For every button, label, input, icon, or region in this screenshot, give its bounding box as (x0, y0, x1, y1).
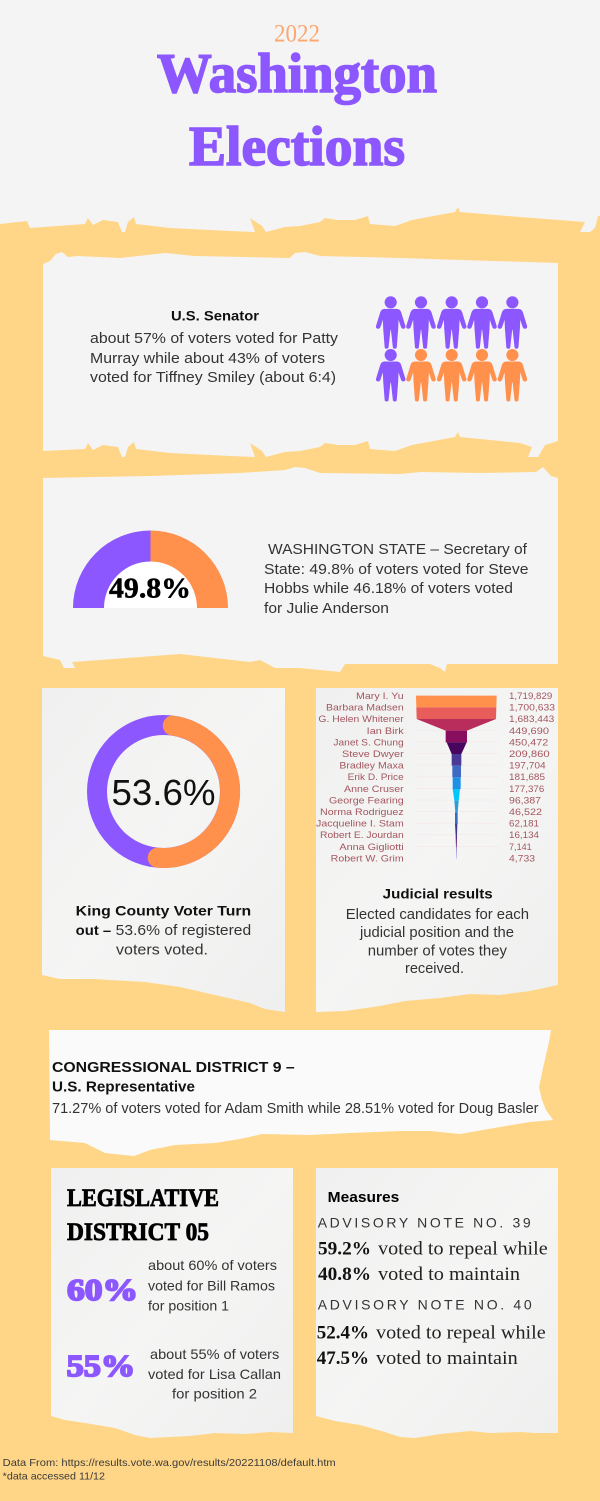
heading: U.S. Representative (52, 1080, 195, 1096)
advisory note 39: voted to maintain (378, 1264, 521, 1285)
text block: out – (76, 922, 111, 938)
panel: U.S. Senator (43, 252, 558, 457)
vote counts: 96,387 (509, 795, 541, 806)
vote counts: 1,719,829 (509, 691, 552, 702)
text block: Lisa Callan: voted for Lisa Callan (148, 1366, 281, 1382)
source note: *data accessed 11/12 (3, 1470, 105, 1482)
candidate names: Bradley Maxa (339, 761, 404, 772)
funnel chart (316, 691, 555, 864)
vote counts: 450,472 (509, 737, 548, 748)
candidate names: Robert W. Grim (331, 854, 404, 864)
text block (90, 330, 339, 386)
candidate names: Steve Dwyer (342, 749, 404, 760)
text block: Bill Ramos (148, 1257, 277, 1314)
panel: Congressional District 9 (49, 1030, 553, 1156)
text block: Bill Ramos: for position 1 (148, 1298, 229, 1314)
candidate names: Norma Rodriguez (320, 807, 404, 818)
heading: Measures (328, 1189, 399, 1206)
gauge value: 49.8% (109, 574, 191, 604)
text block: voters voted. (116, 942, 208, 958)
title line 2: Elections (189, 116, 405, 178)
advisory note 39: 40.8% (318, 1264, 371, 1285)
donut value: 53.6% (112, 772, 216, 813)
candidate names: G. Helen Whitener (318, 714, 404, 725)
heading: Judicial results (383, 885, 493, 901)
advisory note 39: voted to repeal while (378, 1238, 548, 1259)
funnel segments (416, 696, 497, 859)
panel: Legislative District 05 (51, 1168, 293, 1438)
year: 2022 (274, 20, 320, 48)
panel: Judicial results (316, 688, 558, 1012)
vote counts: 197,704 (509, 761, 546, 772)
advisory note 40: voted to maintain (376, 1348, 518, 1369)
candidate names: Erik D. Price (348, 772, 404, 783)
text block: WASHINGTON STATE – Secretary of (268, 541, 528, 558)
title line 1: Washington (157, 43, 437, 105)
advisory note 40 (317, 1296, 546, 1369)
vote counts: 177,376 (509, 784, 544, 795)
candidate names: George Fearing (329, 795, 404, 806)
text block: about 57% of voters voted for Patty (90, 330, 339, 347)
vote counts: 4,733 (509, 854, 535, 864)
text block: voted for Tiffney Smiley (about 6:4) (90, 369, 336, 386)
candidate names: Jacqueline I. Stam (316, 819, 404, 830)
vote counts: 62,181 (509, 819, 539, 830)
text block: Lisa Callan: about 55% of voters (150, 1346, 279, 1362)
vote counts: 449,690 (509, 726, 549, 737)
advisory note 40: 52.4% (317, 1322, 369, 1343)
heading: U.S. Senator (171, 308, 260, 324)
advisory note 39: ADVISORY NOTE NO. 39 (318, 1215, 531, 1231)
text block: Murray while about 43% of voters (90, 350, 325, 367)
text block: 71.27% of voters voted for Adam Smith while 28.51% voted for Doug Basler (52, 1100, 538, 1117)
header panel with torn edge (0, 0, 600, 232)
candidate names: Anne Cruser (344, 784, 404, 795)
vote counts: 46,522 (509, 807, 542, 818)
source note (3, 1457, 336, 1482)
text block: judicial position and the (359, 924, 514, 941)
heading: LEGISLATIVE (67, 1185, 219, 1212)
advisory note 39: 59.2% (318, 1238, 371, 1259)
vote counts: 7,141 (509, 842, 532, 853)
text block: King County Voter Turn (76, 902, 251, 918)
heading (67, 1185, 219, 1246)
advisory note 39 (318, 1215, 548, 1285)
text block: Elected candidates for each (346, 906, 529, 923)
candidate names: Barbara Madsen (326, 703, 404, 714)
text block: Hobbs while 46.18% of voters voted (264, 580, 513, 597)
vote counts: 209,860 (509, 749, 550, 760)
candidate names (316, 691, 404, 864)
stat: 60%: 60% (67, 1272, 138, 1307)
heading: CONGRESSIONAL DISTRICT 9 – (52, 1060, 295, 1076)
candidate names: Janet S. Chung (333, 737, 404, 748)
text block: 53.6% of registered (116, 922, 251, 939)
candidate names: Anna Gigliotti (339, 842, 404, 853)
text block: Lisa Callan: for position 2 (172, 1386, 257, 1402)
panel: Measures (316, 1168, 558, 1438)
text block: for Julie Anderson (264, 600, 389, 617)
candidate names: Ian Birk (367, 726, 404, 737)
candidate names: Robert E. Jourdan (320, 830, 404, 841)
text block (264, 541, 528, 617)
text block: Lisa Callan (148, 1346, 281, 1402)
donut chart (97, 725, 230, 858)
text block (346, 906, 529, 977)
text block (76, 902, 251, 958)
advisory note 40: voted to repeal while (376, 1322, 546, 1343)
candidate names: Mary I. Yu (356, 691, 404, 702)
advisory note 40: ADVISORY NOTE NO. 40 (318, 1296, 532, 1312)
icon: people pictogram 6 to 4 (376, 297, 527, 401)
text block: received. (405, 960, 464, 977)
vote counts: 1,683,443 (509, 714, 554, 725)
source note: Data From: https://results.vote.wa.gov/results/20221108/default.htm (3, 1457, 336, 1469)
vote counts (509, 691, 555, 864)
advisory note 40: 47.5% (317, 1348, 369, 1369)
panel: King County turnout (42, 688, 285, 1012)
stat: 55%: 55% (67, 1348, 135, 1383)
half donut chart (73, 530, 228, 608)
text block: State: 49.8% of voters voted for Steve (264, 561, 528, 578)
heading (52, 1060, 295, 1096)
vote counts: 181,685 (509, 772, 545, 783)
panel: Secretary of State (43, 467, 558, 672)
text block: Bill Ramos: voted for Bill Ramos (148, 1278, 275, 1294)
heading: DISTRICT 05 (67, 1219, 209, 1246)
text block: Bill Ramos: about 60% of voters (148, 1257, 277, 1273)
text block: number of votes they (368, 943, 507, 960)
vote counts: 16,134 (509, 830, 539, 841)
vote counts: 1,700,633 (509, 703, 555, 714)
